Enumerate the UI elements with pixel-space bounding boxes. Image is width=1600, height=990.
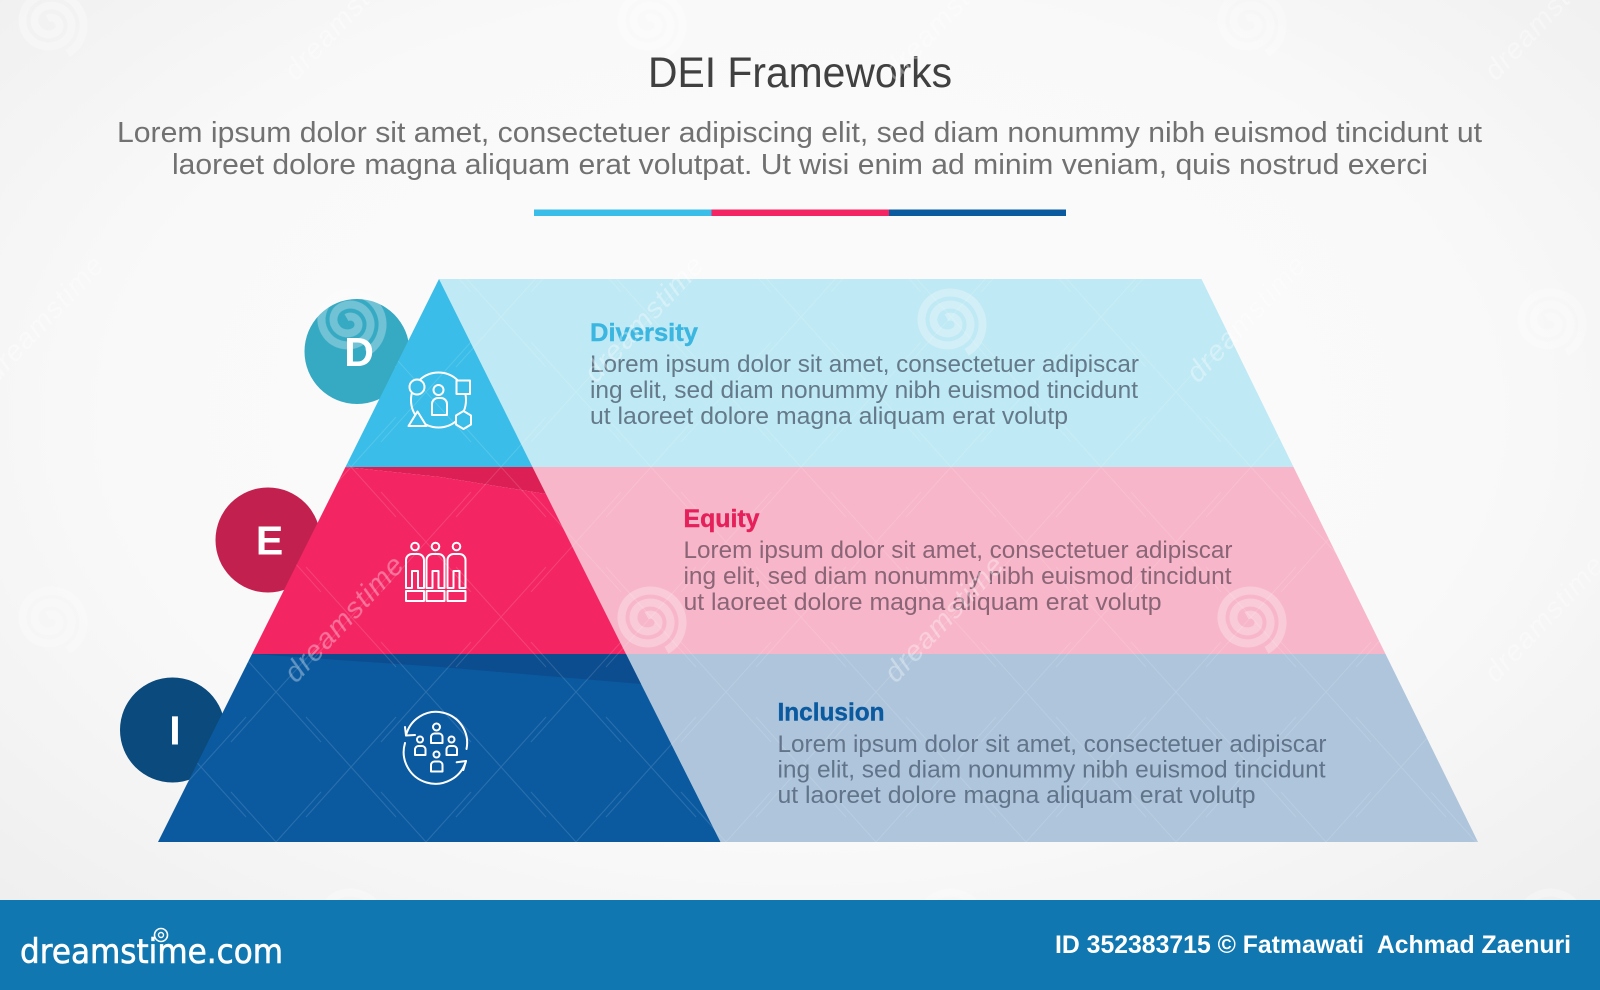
text block: Inclusion [778, 698, 1327, 809]
watermark wordmarks: dreamstime [578, 249, 711, 389]
text block: Diversity: ing elit, sed diam nonummy nibh euismod tincidunt [590, 377, 1138, 404]
light band: Diversity [439, 279, 1294, 467]
text block: Equity: Lorem ipsum dolor sit amet, consectetuer adipiscar [684, 537, 1233, 564]
text block: Diversity: Lorem ipsum dolor sit amet, consectetuer adipiscar [590, 351, 1139, 378]
badge letter D: D [344, 329, 374, 375]
watermark lattice lines [158, 279, 1478, 842]
watermark wordmarks: dreamstime [278, 549, 411, 689]
tricolor divider bar [534, 210, 1066, 216]
icon: three equal people on blocks [406, 543, 466, 601]
subtitle text: Lorem ipsum dolor sit amet, consectetuer adipiscing elit, sed diam nonummy nibh euismod tincidunt ut [117, 117, 1482, 149]
pyramid layer: red body [252, 467, 626, 654]
text block: Equity: ut laoreet dolore magna aliquam erat volutp [684, 589, 1162, 616]
watermark wordmarks [0, 0, 1600, 689]
subtitle text: laoreet dolore magna aliquam erat volutpat. Ut wisi enim ad minim veniam, quis nostrud exerci [172, 149, 1428, 181]
title: DEI Frameworks [648, 49, 952, 97]
subtitle text [117, 117, 1482, 181]
light band: Equity [532, 467, 1386, 654]
text block: Diversity: ut laoreet dolore magna aliquam erat volutp [590, 403, 1068, 430]
text block: Inclusion: ing elit, sed diam nonummy nibh euismod tincidunt [778, 756, 1326, 784]
text block: Diversity [590, 319, 1139, 430]
watermark wordmarks: dreamstime [1180, 249, 1313, 389]
pyramid layer: blue [158, 654, 720, 842]
badge letter E: E [256, 518, 283, 564]
icon: circle of people with arrows [404, 712, 467, 784]
letter badge E [216, 488, 320, 592]
icon: diversity shapes around a person [408, 372, 471, 429]
footer banner [0, 900, 1600, 990]
text block: Diversity: Diversity [590, 319, 698, 347]
text block: Inclusion: ut laoreet dolore magna aliquam erat volutp [778, 782, 1256, 809]
text block: Equity: Equity [684, 505, 760, 533]
letter badge D [304, 299, 410, 404]
badge letter I: I [169, 708, 181, 754]
watermark wordmarks: dreamstime [878, 549, 1011, 689]
footer logo: dreamstime.com [20, 932, 283, 972]
text block: Equity: ing elit, sed diam nonummy nibh euismod tincidunt [684, 563, 1232, 590]
footer credit: ID 352383715 © Fatmawati Achmad Zaenuri [1055, 931, 1571, 959]
letter badge I [120, 678, 225, 782]
text block: Inclusion: Inclusion [778, 698, 884, 726]
pyramid layer: red [346, 467, 546, 494]
light band: Inclusion [626, 654, 1478, 842]
text block: Equity [684, 505, 1233, 616]
text block: Inclusion: Lorem ipsum dolor sit amet, consectetuer adipiscar [778, 731, 1327, 758]
pyramid layer: cyan [346, 279, 532, 467]
